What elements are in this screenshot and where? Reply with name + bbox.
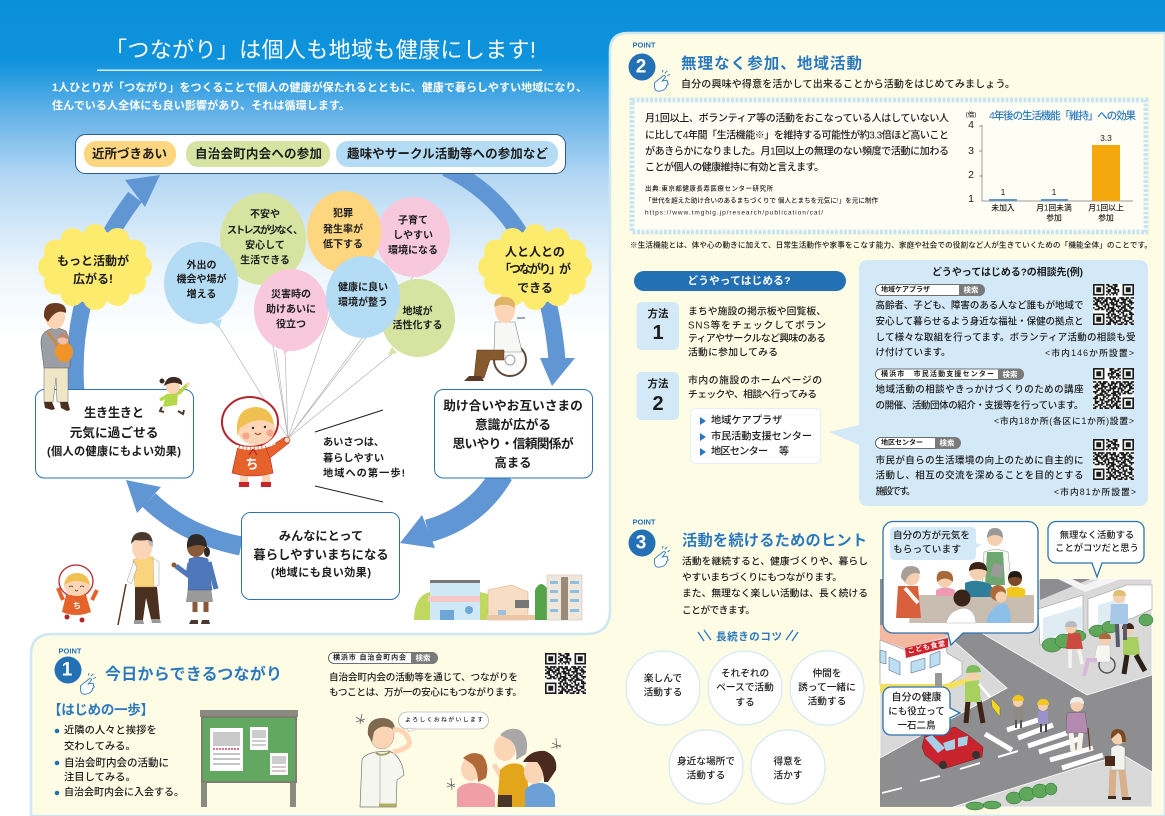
illustration: townscape	[414, 575, 582, 620]
title underline	[97, 70, 542, 71]
citizens centre text: 地域活動の相談やきっかけづくりのための講座	[876, 384, 1084, 396]
arrow: lower right	[428, 474, 502, 531]
box: mutual help: 思いやり・信頼関係が	[452, 436, 574, 451]
quote label: もらっています	[893, 544, 961, 556]
balloon: going out: 外出の	[186, 258, 216, 272]
balloon: disaster: 助けあいに	[266, 302, 316, 316]
category labels: 参加	[1098, 212, 1114, 222]
point 3 heading: 活動を続けるためのヒント	[682, 532, 867, 550]
quote text: 暮らしやすい	[323, 452, 384, 464]
intro text line 1: 1人ひとりが「つながり」をつくることで個人の健康が保たれるとともに、健康で暮らしやすい地域になり、	[52, 80, 587, 94]
facilities list: 地域ケアプラザ	[711, 414, 782, 426]
box: mutual help: 高まる	[495, 455, 531, 470]
bursts	[38, 224, 592, 310]
blue neighbour	[523, 751, 556, 807]
arrow: lower left	[149, 500, 241, 546]
balloon: vitality: 地域が	[402, 304, 432, 318]
first step list: 自治会町内会に入会する。	[64, 786, 184, 798]
first step heading: 【はじめの一歩】	[48, 702, 154, 718]
box: mutual help: 意識が広がる	[475, 417, 551, 432]
point 2 subtitle: 自分の興味や得意を活かして出来ることから活動をはじめてみましょう。	[681, 78, 1015, 90]
search: care plaza: 地域ケアプラザ	[881, 284, 930, 294]
study text	[645, 112, 949, 174]
y axis labels	[968, 119, 974, 205]
tip: enjoy	[626, 651, 700, 725]
bushes	[966, 614, 1153, 810]
character: mascot with balloons	[222, 397, 290, 487]
bar values: 3.3	[1100, 133, 1112, 143]
character: mascot with balloons: ち	[245, 456, 259, 472]
point 3 text	[682, 554, 868, 616]
tip: invite friends: 誘って一緒に	[798, 680, 856, 694]
arrow: upper right	[446, 168, 557, 360]
care plaza text: 高齢者、子ども、障害のある人など誰もが地域で	[876, 300, 1084, 312]
tip: own pace: する	[735, 696, 755, 708]
balloon: crime: 犯罪	[333, 206, 353, 220]
quote line bottom	[315, 486, 383, 502]
box: livable town	[242, 512, 400, 600]
consultation panel	[829, 260, 1148, 506]
tip: enjoy: 活動する	[644, 686, 682, 698]
person: elderly pedestrian	[1066, 697, 1090, 751]
tip circles	[626, 651, 864, 804]
tips heading: 長続きのコツ	[716, 630, 782, 643]
district centre text: 市民が自らの生活環境の向上のために自主的に	[876, 454, 1084, 466]
person: woman on sidewalk	[1105, 729, 1131, 800]
quote label	[890, 527, 982, 560]
search: care plaza: 検索	[964, 284, 979, 294]
tip: enjoy: 楽しんで	[644, 672, 682, 684]
category labels: 月1回以上	[1088, 204, 1124, 212]
pink neighbour	[457, 753, 495, 807]
quote text	[323, 436, 405, 480]
balloon: crime	[307, 191, 381, 273]
citizens centre text	[876, 384, 1134, 426]
arrow heads	[125, 175, 575, 548]
study source: https://www.tmghig.jp/research/publication/cat/	[645, 210, 823, 216]
method 1: 活動に参加してみる	[688, 346, 778, 358]
burst: connections form: できる	[517, 281, 553, 295]
community buildings	[1038, 579, 1152, 645]
tip: invite friends: 仲間を	[812, 666, 842, 680]
illustration: grandfather with cane	[118, 532, 161, 625]
illustration: school girl	[172, 534, 216, 624]
method 1	[636, 302, 826, 358]
district centre text: 施設です。	[876, 486, 916, 498]
table	[909, 595, 1034, 623]
cycle arrows	[75, 168, 575, 548]
tip: own pace: それぞれの	[721, 668, 769, 680]
speech bubble: no overdoing: 無理なく活動する	[1060, 529, 1134, 540]
point 3 text: やすいまちづくりにもつながります。	[682, 570, 842, 584]
tip: use strengths: 活かす	[773, 768, 803, 782]
balloon: going out	[164, 242, 238, 328]
method 1: 1	[652, 322, 664, 344]
illustration: notice board	[200, 710, 298, 807]
neighbourhood association text: 自治会町内会の活動等を通じて、つながりを	[329, 672, 518, 684]
care plaza text: 安心して暮らせるよう身近な福祉・保健の拠点と	[876, 316, 1084, 328]
balloon: healthy environment: 健康に良い	[338, 280, 388, 294]
category labels: 参加	[1046, 212, 1062, 222]
burst: more activity: もっと活動が	[57, 253, 129, 268]
activity pills bar	[76, 134, 566, 174]
search: citizens centre: 検索	[1002, 369, 1018, 379]
study text: があきらかになりました。月1回以上の無理のない頻度で活動に加わる	[645, 144, 949, 158]
point 2 badge	[628, 40, 670, 91]
tip: own pace: ペースで活動	[716, 680, 774, 694]
speech bubble: two birds	[883, 687, 960, 735]
first step list: 交わしてみる。	[64, 740, 136, 752]
illustration: parent with baby	[41, 303, 73, 411]
tip: nearby place	[669, 730, 743, 804]
point 3 text: ことができます。	[682, 604, 755, 616]
panel background with pointer	[829, 260, 1148, 506]
method 1: 方法	[648, 307, 669, 320]
illustration: running child	[160, 377, 190, 414]
point 3 badge: POINT	[633, 518, 656, 526]
illustration: street scene	[880, 579, 1153, 810]
balloon: healthy environment	[326, 256, 400, 338]
illustration: small mascot	[58, 565, 97, 622]
burst: more activity: 広がる!	[73, 271, 113, 286]
tip: nearby place: 身近な場所で	[677, 754, 735, 768]
search: district centre: 検索	[940, 438, 955, 448]
study source: 出典:東京都健康長寿医療センター研究所	[645, 184, 774, 192]
box: lively personal health: 元気に過ごせる	[70, 425, 158, 440]
bar chart	[966, 109, 1136, 222]
tips heading	[698, 630, 798, 643]
search: district centre: 地区センター	[881, 438, 923, 446]
point 1 heading: 今日からできるつながり	[105, 664, 282, 684]
bar values	[1001, 133, 1112, 197]
balloon: crime: 発生率が	[323, 222, 363, 236]
point 2 badge: POINT	[633, 40, 656, 50]
box: livable town: (地域にも良い効果)	[271, 565, 371, 579]
how to start header	[634, 271, 846, 291]
tip: use strengths: 得意を	[773, 754, 803, 768]
point 2 heading: 無理なく参加、地域活動	[681, 54, 862, 72]
search box: neighbourhood association: 横浜市 自治会町内会	[333, 652, 406, 662]
balloon: stress: 安心して	[245, 238, 285, 252]
y axis labels: 2	[968, 169, 974, 181]
illustration: wheelchair user	[464, 297, 526, 381]
burst: more activity	[38, 224, 152, 310]
speech bubble: no overdoing: ことがコツだと思う	[1055, 542, 1139, 553]
balloon: disaster: 役立つ	[276, 318, 306, 330]
facilities list: 地区センター 等	[711, 444, 789, 458]
y axis labels: 4	[968, 119, 974, 131]
point 1 badge: POINT	[59, 646, 82, 656]
box: lively personal health: (個人の健康にもよい効果)	[47, 444, 181, 458]
how to start column	[634, 271, 846, 464]
search: care plaza	[876, 284, 985, 296]
study text: に比して4年間「生活機能※」を維持する可能性が約3.3倍ほど高いこと	[645, 128, 949, 142]
tip: invite friends	[790, 651, 864, 725]
box: livable town: 暮らしやすいまちになる	[253, 547, 389, 562]
quote label: 自分の方が元気を	[893, 530, 970, 542]
point 1 panel	[48, 646, 586, 807]
chart title: 4年後の生活機能「維持」への効果	[989, 109, 1136, 122]
balloon: disaster: 災害時の	[271, 288, 311, 300]
citizens centre text: の開催、活動団体の紹介・支援等を行っています。	[876, 400, 1084, 412]
road	[880, 579, 1152, 807]
balloon: healthy environment: 環境が整う	[338, 296, 388, 308]
speech bubble: two birds: 一石二鳥	[897, 720, 936, 732]
qr: care plaza	[1093, 284, 1134, 325]
tip: own pace	[708, 651, 782, 725]
search: citizens centre: 横浜市 市民活動支援センター	[881, 369, 994, 378]
bubble body	[883, 522, 1038, 645]
burst: connections form	[478, 224, 592, 310]
balloon: stress: 生活できる	[240, 254, 290, 266]
pill: neighbours	[84, 141, 176, 167]
first step list: 自治会町内会の活動に	[64, 756, 169, 769]
method 2	[636, 372, 822, 420]
search box: neighbourhood association	[328, 652, 438, 664]
people: school children	[1012, 695, 1049, 732]
study text: ことが個人の健康維持に有効と言えます。	[645, 160, 824, 174]
illustration: small mascot: ち	[73, 600, 81, 610]
burst: connections form: 人と人との	[505, 245, 565, 259]
first step list: 注目してみる。	[64, 770, 136, 784]
search box: neighbourhood association: 検索	[416, 652, 431, 662]
neighbourhood association text	[329, 672, 522, 698]
point 3 badge: 3	[636, 532, 646, 554]
people at table	[896, 562, 1025, 623]
children cafeteria building	[880, 625, 982, 693]
balloon strings	[219, 273, 413, 438]
background sky gradient	[0, 0, 1165, 340]
point 2 badge: 2	[636, 56, 646, 78]
category labels: 月1回未満	[1036, 202, 1072, 212]
crosswalk and road markings	[882, 720, 1103, 793]
qr: district centre	[1093, 439, 1134, 480]
district centre text	[876, 454, 1136, 498]
point 1 badge: 1	[62, 660, 73, 680]
pill label 3: 趣味やサークル活動等への参加など	[347, 146, 548, 161]
arrow: upper left	[75, 197, 135, 392]
sidewalk: left block	[880, 630, 1007, 758]
footnote: ※生活機能とは、体や心の動きに加えて、日常生活動作や家事をこなす能力、家庭や社会での役割など人が生きていくための「機能全体」のことです。	[630, 240, 1152, 250]
first step list: 近隣の人々と挨拶を	[64, 724, 157, 736]
balloon: childcare: しやすい	[393, 230, 433, 242]
title: 「つながり」は個人も地域も健康にします!	[105, 38, 536, 62]
y axis labels: 1	[968, 193, 974, 205]
study source: 「世代を超えた助け合いのあるまちづくりで 個人とまちを元気に!」を元に制作	[645, 196, 878, 204]
method 1: SNS等をチェックしてボラン	[688, 318, 826, 332]
balloon: vitality: 活性化する	[392, 318, 442, 332]
qr code	[545, 653, 586, 694]
point 3 badge	[628, 518, 670, 567]
burst: connections form: 「つながり」が	[499, 261, 571, 276]
pill: neighbourhood association	[186, 141, 330, 167]
balloon: vitality	[381, 279, 455, 357]
study text: 月1回以上、ボランティア等の活動をおこなっている人はしていない人	[645, 112, 949, 124]
method 2: 市内の施設のホームページの	[688, 374, 822, 386]
balloon: stress: 不安や	[250, 208, 280, 220]
speech bubble: よろしくおねがいします	[405, 716, 483, 724]
speech bubble: volunteer cafeteria	[883, 522, 1038, 645]
greeting quote	[315, 410, 405, 502]
box: lively personal health: 生き生きと	[84, 405, 144, 420]
speech bubble: two birds: にも役立って	[888, 706, 945, 718]
top road strip	[1040, 579, 1090, 600]
speech bubble: two birds: 自分の健康	[892, 690, 942, 704]
point 3 text: 活動を継続すると、健康づくりや、暮らし	[682, 554, 868, 568]
tip: invite friends: 活動する	[808, 694, 846, 708]
point 2 panel	[628, 40, 1152, 250]
facilities list: 市民活動支援センター	[711, 430, 812, 442]
consultation heading: どうやってはじめる?の相談先(例)	[932, 266, 1083, 278]
pill label 2: 自治会町内会への参加	[195, 146, 322, 161]
balloon: going out: 増える	[187, 288, 216, 300]
y axis unit: (倍)	[966, 110, 976, 118]
quote text: あいさつは、	[323, 436, 384, 448]
category labels: 未加入	[991, 202, 1015, 212]
illustration: greeting neighbours	[356, 712, 561, 807]
balloon: childcare	[376, 197, 450, 277]
balloon: crime: 低下する	[323, 238, 363, 250]
facilities list	[690, 408, 820, 464]
axes	[979, 125, 1133, 201]
care plaza text: <市内146か所設置>	[1045, 347, 1134, 358]
method 2: 方法	[648, 377, 669, 390]
district centre text: 活動し、相互の交流を深めることを目的とする	[876, 470, 1084, 482]
car	[922, 727, 983, 769]
point 1 badge	[54, 646, 96, 694]
box: mutual help: 助け合いやお互いさまの	[443, 398, 583, 413]
intro text line 2: 住んでいる人全体にも良い影響があり、それは循環します。	[52, 98, 350, 112]
volunteer server	[982, 528, 1012, 590]
bar: less than monthly	[1041, 199, 1068, 201]
category labels	[991, 202, 1124, 222]
children cafeteria building: こども食堂	[907, 639, 946, 655]
method 2: チェックや、相談へ行ってみる	[688, 388, 817, 400]
person: crossing guard	[965, 665, 1000, 723]
district centre text: <市内81か所設置>	[1054, 486, 1136, 497]
citizens centre text: <市内18か所(各区に1か所)設置>	[994, 415, 1134, 426]
balloon: stress	[220, 193, 306, 285]
tip: use strengths	[751, 730, 825, 804]
search: district centre	[876, 437, 961, 449]
search: citizens centre	[876, 368, 1024, 380]
bar frame	[76, 134, 566, 174]
speech bubble: no overdoing	[1048, 522, 1144, 577]
quote text: 地域への第一歩!	[323, 466, 405, 480]
method 2: 2	[652, 393, 664, 415]
man bowing	[360, 718, 409, 807]
speech bubble	[398, 712, 488, 732]
balloon: childcare: 環境になる	[388, 244, 438, 256]
method 1: ティアやサークルなど興味のある	[688, 332, 826, 344]
balloon: childcare: 子育て	[398, 214, 428, 226]
sidewalk: upper right	[980, 579, 1152, 695]
bar: monthly or more	[1092, 145, 1120, 201]
first step list	[55, 724, 184, 798]
pill: hobbies	[336, 141, 558, 167]
balloon: stress: ストレスが少なく、	[227, 224, 303, 236]
sidewalk: bottom right	[953, 755, 1152, 807]
sparkles	[356, 714, 561, 790]
main title block	[52, 38, 587, 112]
people: wheelchair group	[1065, 590, 1145, 676]
box: lively personal health	[36, 390, 194, 478]
point 3 panel	[626, 518, 868, 804]
pill label 1: 近所づきあい	[92, 146, 167, 161]
care plaza text: け付けています。	[876, 346, 951, 358]
balloons	[164, 191, 455, 357]
balloon: disaster	[254, 269, 328, 354]
neighbourhood association text: もつことは、万が一の安心にもつながります。	[329, 686, 522, 698]
balloon: going out: 機会や場が	[176, 272, 226, 286]
point 3 text: また、無理なく楽しい活動は、長く続ける	[682, 586, 868, 600]
box: mutual help	[434, 390, 592, 478]
bar values: 1	[1001, 187, 1006, 197]
tip: nearby place: 活動する	[687, 768, 725, 782]
bar: not joined	[989, 199, 1017, 201]
y axis labels: 3	[968, 145, 974, 157]
box: livable town: みんなにとって	[279, 529, 363, 543]
qr: citizens centre	[1093, 368, 1134, 409]
care plaza text	[876, 300, 1136, 358]
yellow neighbour	[492, 729, 528, 807]
study source	[645, 184, 878, 216]
care plaza text: して様々な取組を行ってます。ボランティア活動の相談も受	[876, 332, 1136, 344]
quote line top	[315, 410, 383, 432]
hatched study box	[632, 100, 1146, 232]
method 1: まちや施設の掲示板や回覧板、	[688, 304, 826, 318]
how to start header: どうやってはじめる?	[688, 274, 790, 287]
bar values: 1	[1052, 187, 1057, 197]
